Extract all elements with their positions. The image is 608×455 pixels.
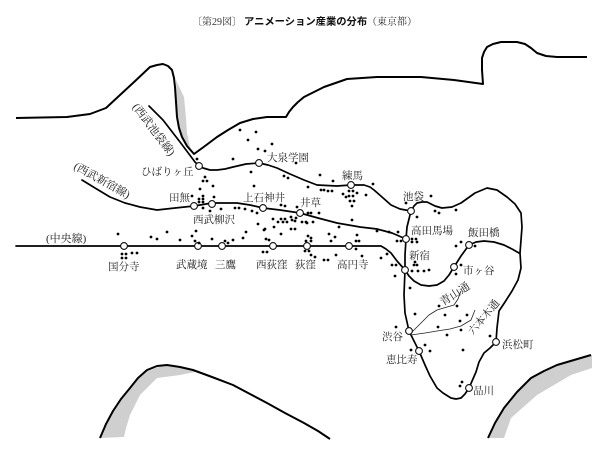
station labels: 武蔵境	[176, 258, 208, 271]
title	[192, 15, 417, 28]
label: Seibu Shinjuku line: (西武新宿線)	[72, 159, 133, 202]
station labels: 渋谷	[382, 330, 403, 343]
dots: anime studios	[117, 129, 491, 387]
coastline: southwest with shading	[100, 365, 330, 439]
label: Seibu Ikebukuro line: (西武池袋線)	[130, 100, 179, 159]
station labels: 浜松町	[502, 338, 534, 351]
station labels: 高田馬場	[411, 224, 453, 237]
station labels: 恵比寿	[386, 353, 418, 366]
label: Roppongi-dori: 六本木通	[465, 297, 503, 337]
station labels: 田無	[169, 191, 190, 204]
title: アニメーション産業の分布	[244, 15, 367, 28]
label: Chuo line: (中央線)	[46, 231, 87, 245]
coastline: southeast with shading	[488, 355, 592, 438]
station labels: 練馬	[342, 169, 363, 182]
station labels: 飯田橋	[468, 226, 500, 239]
rail: Seibu Ikebukuro line	[149, 106, 411, 211]
station labels: ひばりヶ丘	[141, 166, 194, 178]
station labels: 大泉学園	[267, 151, 309, 164]
station labels: 品川	[473, 385, 494, 397]
station labels: 新宿	[409, 249, 430, 262]
road: Roppongi-dori	[411, 310, 475, 335]
station labels: 井草	[300, 196, 321, 209]
label: Aoyama-dori: 青山通	[437, 279, 472, 309]
title: （東京都）	[367, 15, 417, 28]
station labels: 西武柳沢	[193, 213, 235, 226]
station labels: 池袋	[403, 190, 424, 203]
title: 〔第29図〕	[192, 15, 242, 28]
rail: Yamanote loop and eastern line	[404, 188, 522, 399]
rail: Seibu Shinjuku line	[82, 180, 406, 239]
rail: Chuo line	[16, 241, 519, 286]
station labels: 市ヶ谷	[463, 264, 495, 277]
coastline: north boundary with shading	[16, 42, 587, 154]
station labels: 西荻窪	[256, 258, 288, 271]
stations	[121, 160, 499, 391]
station labels	[108, 151, 534, 397]
station labels: 荻窪	[295, 258, 316, 271]
road: Aoyama-dori	[410, 291, 461, 334]
station labels: 上石神井	[243, 191, 285, 204]
station labels: 三鷹	[215, 258, 236, 271]
station labels: 国分寺	[108, 260, 140, 273]
station labels: 高円寺	[337, 258, 369, 271]
